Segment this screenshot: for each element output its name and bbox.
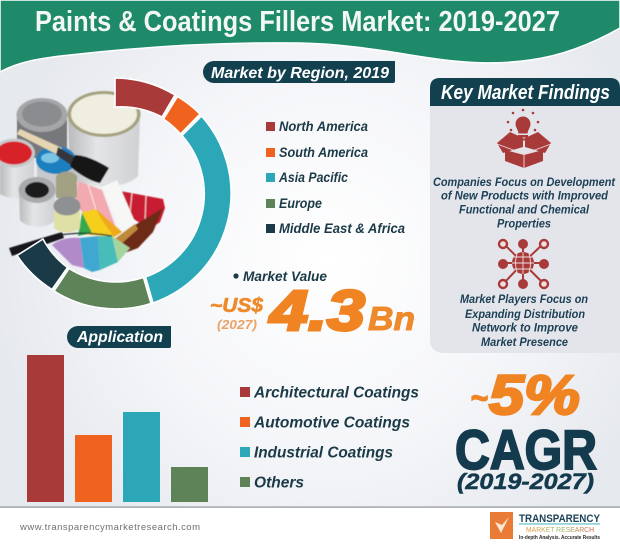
currency label: ~US$ (210, 295, 264, 317)
legend item: South America: South America (279, 145, 368, 160)
paint roller (102, 180, 135, 230)
red can (0, 138, 35, 198)
icon: open box with light bulb (497, 109, 551, 168)
finding 1 text: of New Products with Improved (441, 190, 609, 202)
heading: market by region (203, 61, 395, 83)
growth rate: ~ (470, 377, 488, 418)
growth rate: 5% (489, 363, 580, 426)
finding 2 text: Market Presence (481, 337, 569, 349)
small black can (18, 177, 56, 227)
small yellow can (54, 196, 80, 232)
legend item: Architectural Coatings: Architectural Coatings (253, 384, 419, 402)
segment: Asia Pacific (146, 116, 231, 303)
heading: market by region: Market by Region, 2019 (211, 65, 389, 82)
logo: MARKET RESEARCH (526, 527, 594, 534)
CAGR callout (455, 363, 597, 494)
finding 1 text: Companies Focus on Development (433, 177, 616, 189)
pink swatch (76, 181, 116, 228)
year label: (2027) (217, 317, 257, 332)
finding 1 text: Properties (497, 218, 551, 230)
legend item: Asia Pacific: Asia Pacific (278, 170, 348, 185)
bullet and label: Market Value (243, 268, 327, 284)
legend item: Others: Others (254, 474, 304, 492)
back grey can (16, 98, 68, 158)
segment: Europe (54, 268, 151, 309)
heading: application: Application (76, 329, 163, 346)
rainbow swatch fan (52, 236, 130, 272)
donut chart: market by region (17, 78, 231, 309)
large cream can (68, 91, 140, 186)
dark pencil (9, 232, 112, 256)
segment: South America (164, 96, 200, 134)
red swatches (113, 191, 165, 254)
icon: globe network (498, 239, 549, 289)
bar: Industrial Coatings (123, 412, 160, 502)
bar: Automotive Coatings (75, 435, 112, 502)
legend item: Middle East and Africa: Middle East & Africa (279, 221, 405, 236)
blue can (36, 146, 76, 195)
title: Paints & Coatings Fillers Market: 2019-2027 (35, 6, 560, 38)
segment: North America (115, 78, 175, 117)
finding 2 text (460, 294, 588, 349)
market value callout (210, 268, 415, 343)
legend: application (240, 384, 419, 492)
value: 4.3 (269, 279, 365, 343)
segment: Middle East and Africa (17, 239, 68, 290)
panel: key market findings (430, 78, 620, 353)
bar: Others (171, 467, 208, 502)
finding 2 text: Market Players Focus on (460, 294, 588, 306)
small olive can (56, 172, 77, 198)
header band (0, 0, 620, 72)
legend item: Automotive Coatings: Automotive Coatings (253, 414, 410, 432)
legend item: North America: North America (279, 119, 368, 134)
CAGR label: CAGR (455, 418, 597, 481)
unit: Bn (368, 300, 415, 337)
finding 1 text: Functional and Chemical (459, 204, 590, 216)
legend item: Industrial Coatings: Industrial Coatings (254, 444, 393, 462)
panel background (430, 100, 620, 353)
finding 2 text: Network to Improve (472, 322, 579, 334)
heading: application (67, 326, 171, 348)
paint brush (17, 129, 109, 183)
yellow orange swatch (78, 209, 122, 237)
logo (490, 512, 601, 541)
finding 1 text (433, 177, 616, 230)
bar chart: application (27, 355, 208, 502)
paint cans and swatches photo (0, 91, 165, 272)
website url: www.transparencymarketresearch.com (19, 522, 200, 533)
finding 2 text: Expanding Distribution (465, 309, 585, 321)
bar: Architectural Coatings (27, 355, 64, 502)
logo: TRANSPARENCY (519, 513, 601, 525)
legend: regions (266, 119, 405, 236)
legend item: Europe: Europe (279, 196, 322, 211)
logo: In-depth Analysis. Accurate Results (519, 535, 600, 541)
period: (2019-2027) (457, 469, 594, 494)
footer (0, 506, 620, 544)
